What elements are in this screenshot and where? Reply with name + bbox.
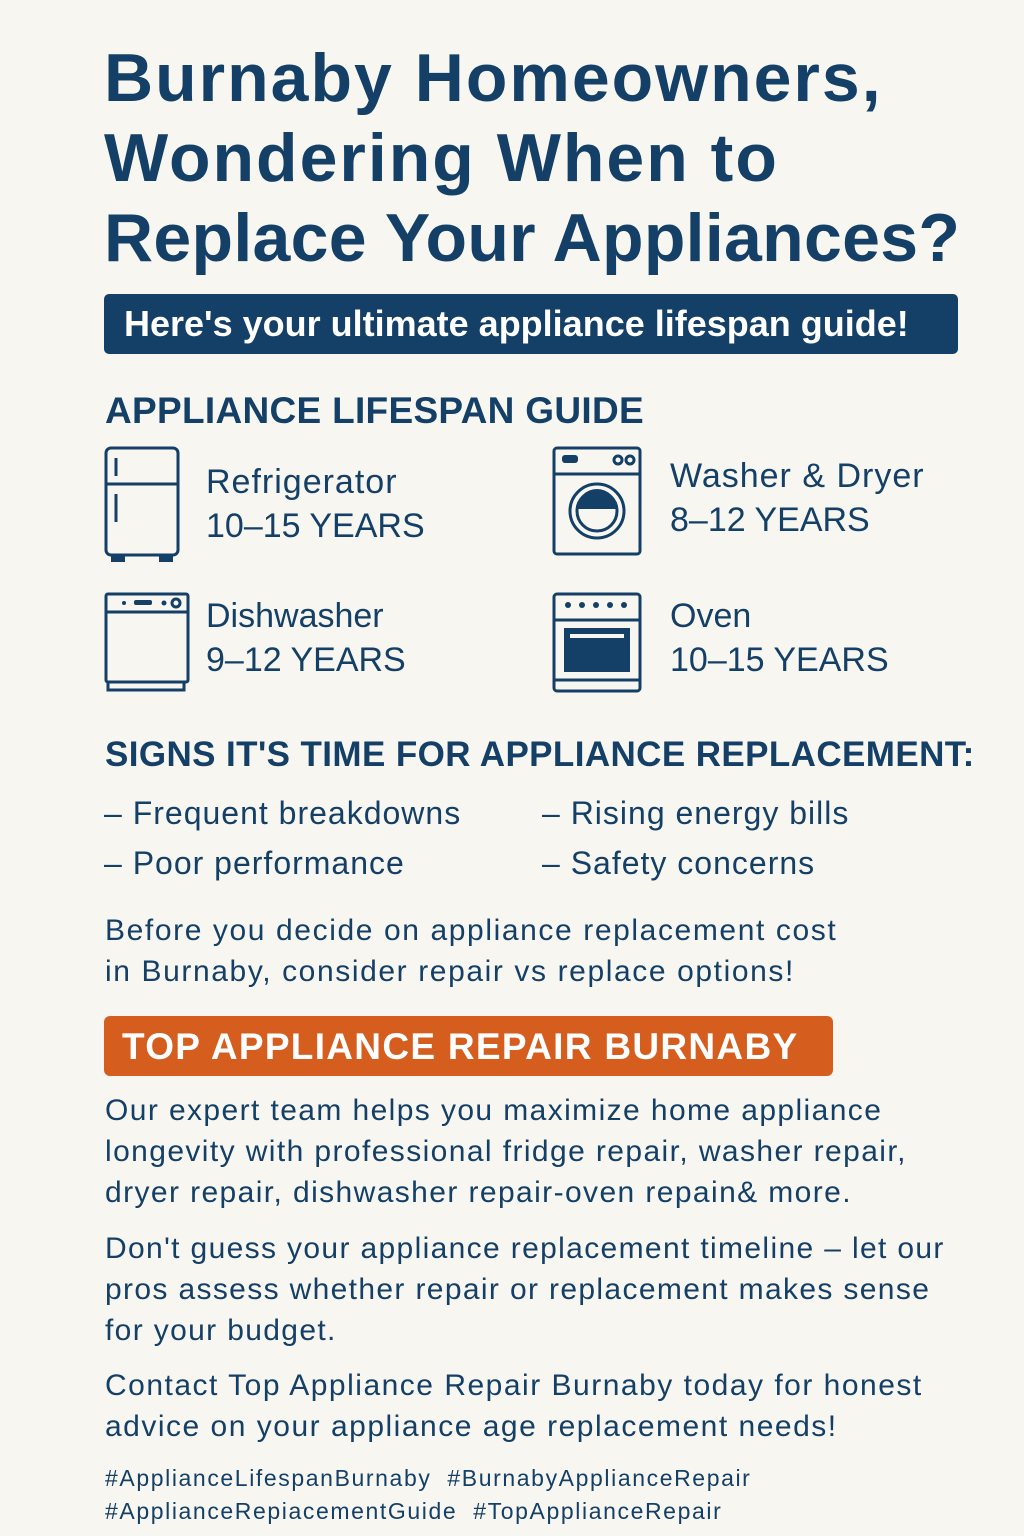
text: timeline: for your budget. xyxy=(105,1314,337,1347)
title: Wondering When to xyxy=(104,120,779,196)
icon: dishwasher xyxy=(104,592,190,692)
text: washer & dryer xyxy=(670,457,925,539)
text: contact: advice on your appliance age replacement needs! xyxy=(105,1410,838,1443)
list: signs xyxy=(104,795,849,881)
text: repair vs replace: in Burnaby, consider repair vs replace options! xyxy=(105,955,795,988)
list: signs: – Poor performance xyxy=(104,845,405,881)
subtitle banner: Here's your ultimate appliance lifespan guide! xyxy=(124,303,909,344)
subtitle banner xyxy=(104,294,958,354)
list: signs: – Frequent breakdowns xyxy=(104,795,461,831)
text: expert team: dryer repair, dishwasher repair-oven repain& more. xyxy=(105,1176,852,1209)
text: refrigerator: Refrigerator xyxy=(206,463,398,501)
icon: refrigerator xyxy=(104,446,180,562)
icon: oven xyxy=(552,592,642,692)
text: repair vs replace: Before you decide on appliance replacement cost xyxy=(105,914,837,947)
title xyxy=(104,40,960,276)
list: signs: – Rising energy bills xyxy=(542,795,849,831)
text: repair vs replace xyxy=(105,914,837,988)
text: contact: Contact Top Appliance Repair Burnaby today for honest xyxy=(105,1369,923,1402)
text: washer & dryer: Washer & Dryer xyxy=(670,457,925,495)
orange banner xyxy=(104,1016,833,1076)
text: dishwasher xyxy=(206,597,406,679)
hashtags: #ApplianceLifespanBurnaby #BurnabyApplianceRepair xyxy=(105,1465,751,1491)
text: dishwasher: Dishwasher xyxy=(206,597,384,635)
text: oven: 10–15 YEARS xyxy=(670,641,889,679)
text: oven xyxy=(670,597,889,679)
section heading: signs: SIGNS IT'S TIME FOR APPLIANCE REPLACEMENT: xyxy=(105,735,975,774)
hashtags xyxy=(105,1465,751,1524)
icon: washer xyxy=(552,446,642,556)
text: washer & dryer: 8–12 YEARS xyxy=(670,501,870,539)
title: Replace Your Appliances? xyxy=(104,200,960,276)
text: contact xyxy=(105,1369,923,1443)
text: timeline: pros assess whether repair or replacement makes sense xyxy=(105,1273,930,1306)
text: expert team: Our expert team helps you maximize home appliance xyxy=(105,1094,882,1127)
title: Burnaby Homeowners, xyxy=(104,40,883,116)
text: refrigerator xyxy=(206,463,425,545)
text: timeline xyxy=(105,1232,945,1347)
text: refrigerator: 10–15 YEARS xyxy=(206,507,425,545)
text: dishwasher: 9–12 YEARS xyxy=(206,641,406,679)
orange banner: TOP APPLIANCE REPAIR BURNABY xyxy=(122,1026,798,1067)
text: expert team: longevity with professional fridge repair, washer repair, xyxy=(105,1135,907,1168)
text: timeline: Don't guess your appliance replacement timeline – let our xyxy=(105,1232,945,1265)
list: signs: – Safety concerns xyxy=(542,845,815,881)
text: expert team xyxy=(105,1094,907,1209)
hashtags: #ApplianceRepiacementGuide #TopApplianceRepair xyxy=(105,1498,722,1524)
section heading: lifespan guide: APPLIANCE LIFESPAN GUIDE xyxy=(105,390,644,431)
text: oven: Oven xyxy=(670,597,751,635)
